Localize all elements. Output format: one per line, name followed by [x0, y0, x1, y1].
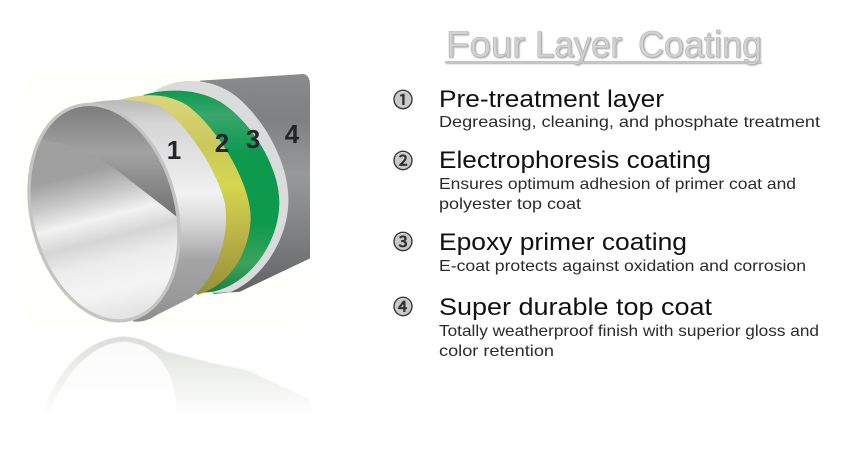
pipe reflection [42, 337, 310, 417]
number 1: 1 [167, 135, 181, 165]
description 3: E-coat protects against oxidation and corrosion [439, 258, 806, 275]
title: Layer [535, 24, 622, 65]
list item 3 [393, 226, 806, 275]
white ring edge [153, 81, 288, 293]
badge 3: ③ [393, 226, 413, 255]
description 2: Ensures optimum adhesion of primer coat and [439, 176, 796, 193]
pipe opening [27, 102, 180, 322]
description 4 continued: color retention [439, 343, 554, 360]
list item 4 [393, 291, 819, 360]
layer 3: green band [143, 91, 279, 293]
description 4: Totally weatherproof finish with superior gloss and [439, 323, 819, 340]
title: Coating [638, 24, 762, 65]
list item 2 [393, 145, 796, 213]
pipe body: layer 4 top coat [200, 74, 310, 294]
badge 2: ② [393, 145, 413, 174]
number 4: 4 [285, 119, 300, 149]
heading 2: Electrophoresis coating [439, 147, 711, 174]
pipe illustration [27, 74, 310, 322]
heading 4: Super durable top coat [439, 294, 712, 321]
heading 3: Epoxy primer coating [439, 229, 687, 256]
list item 1 [393, 84, 821, 131]
number 3: 3 [246, 124, 260, 154]
number 2: 2 [215, 128, 229, 158]
badge 4: ④ [393, 291, 413, 320]
description 1: Degreasing, cleaning, and phosphate treatment [439, 114, 821, 131]
layer 1: pre-treatment band [80, 100, 226, 322]
layer 2: yellow band [118, 95, 251, 295]
title: Four [446, 24, 525, 65]
heading 1: Pre-treatment layer [439, 86, 664, 113]
badge 1: ① [393, 84, 413, 113]
description 2 continued: polyester top coat [439, 196, 582, 213]
title [445, 24, 762, 65]
